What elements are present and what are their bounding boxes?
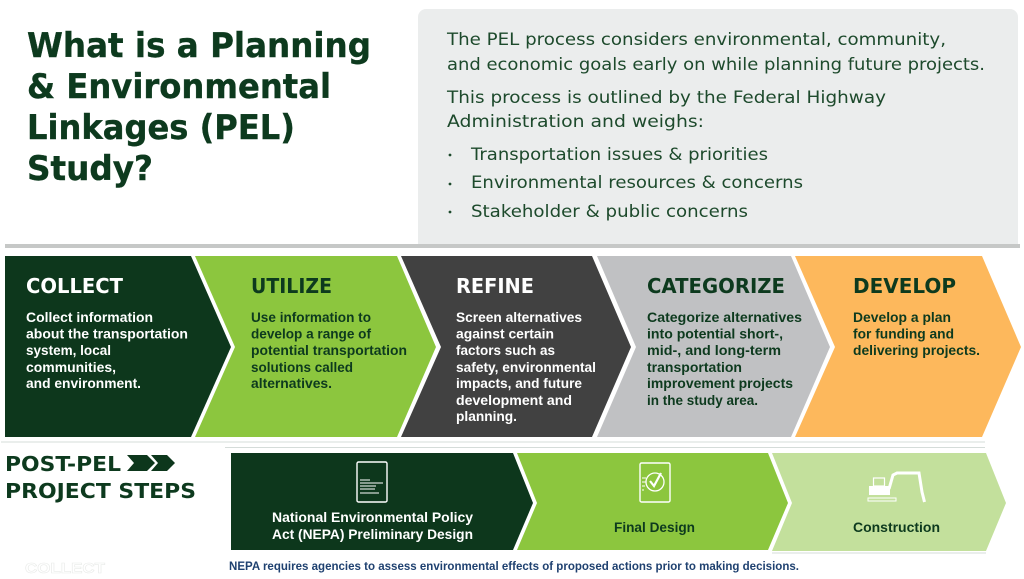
step: utilize: [195, 256, 436, 437]
step: collect: COLLECT: [26, 274, 123, 298]
heading: post-PEL project steps: [5, 452, 196, 503]
step: develop: DEVELOP: [853, 274, 956, 298]
text block: PEL description: Administration and weighs:: [447, 112, 704, 131]
list: weighed factors: Stakeholder & public concerns: [471, 202, 748, 221]
step: categorize: [597, 256, 830, 437]
title: [27, 26, 371, 189]
step: categorize: CATEGORIZE: [647, 274, 785, 298]
post step: construction: [772, 453, 1006, 551]
step: utilize: solutions called: [251, 359, 353, 375]
post step: final design: [517, 453, 788, 550]
step: collect: about the transportation: [26, 326, 188, 342]
footnote: NEPA definition: NEPA requires agencies to assess environmental effects of proposed actions prior to making decisions.: [229, 559, 799, 573]
step: refine: impacts, and future: [456, 375, 582, 391]
step: refine: factors such as: [456, 342, 555, 358]
title: What is a Planning: [27, 26, 371, 66]
list: weighed factors: Environmental resources & concerns: [471, 173, 803, 192]
post step: NEPA preliminary design: National Environmental Policy: [272, 509, 473, 525]
step: develop: [795, 256, 1021, 437]
title: Linkages (PEL): [27, 108, 295, 148]
step: develop: delivering projects.: [853, 342, 980, 358]
heading: post-PEL project steps: PROJECT STEPS: [5, 479, 196, 503]
step: refine: development and: [456, 392, 572, 408]
watermark: collect: COLLECT: [25, 560, 105, 577]
panel: intro background: [418, 9, 1018, 244]
text block: PEL description: The PEL process considers environmental, community,: [446, 30, 946, 49]
post step: construction: Construction: [853, 519, 940, 535]
step: refine: REFINE: [456, 274, 534, 298]
step: utilize: alternatives.: [251, 375, 332, 391]
icon: document: [357, 462, 387, 502]
step: collect: system, local: [26, 342, 111, 358]
step: refine: against certain: [456, 326, 554, 342]
list: weighed factors: [449, 145, 803, 221]
step: refine: Screen alternatives: [456, 309, 582, 325]
step: collect: and environment.: [26, 375, 141, 391]
step: collect: communities,: [26, 359, 116, 375]
step: categorize: in the study area.: [647, 392, 758, 408]
step: refine: planning.: [456, 408, 517, 424]
step: categorize: mid-, and long-term: [647, 342, 781, 358]
step: categorize: Categorize alternatives: [647, 309, 802, 325]
post step: NEPA preliminary design: Act (NEPA) Preliminary Design: [272, 526, 473, 542]
step: utilize: develop a range of: [251, 326, 371, 342]
step: categorize: into potential short-,: [647, 326, 783, 342]
step: refine: [401, 256, 631, 437]
step: utilize: Use information to: [251, 309, 371, 325]
step: refine: safety, environmental: [456, 359, 596, 375]
icon: excavator: [868, 473, 924, 502]
post step: final design: Final Design: [614, 519, 695, 535]
text block: PEL description: [446, 30, 985, 131]
step: categorize: improvement projects: [647, 375, 793, 391]
step: develop: Develop a plan: [853, 309, 951, 325]
panel: divider shadow: [5, 244, 1020, 248]
step: develop: for funding and: [853, 326, 954, 342]
icon: checklist document: [640, 463, 670, 502]
step: categorize: transportation: [647, 359, 742, 375]
title: Study?: [27, 149, 153, 189]
title: & Environmental: [27, 67, 331, 107]
text block: PEL description: and economic goals early on while planning future projects.: [447, 55, 985, 74]
list: weighed factors: Transportation issues & priorities: [470, 145, 768, 164]
post step: NEPA preliminary design: [231, 453, 533, 550]
heading: post-PEL project steps: POST-PEL: [5, 452, 121, 476]
icon: double chevron arrows: [127, 455, 175, 471]
step: collect: Collect information: [26, 309, 153, 325]
step: collect: [5, 256, 231, 437]
step: utilize: UTILIZE: [251, 274, 332, 298]
step: utilize: potential transportation: [251, 342, 407, 358]
text block: PEL description: This process is outlined by the Federal Highway: [446, 88, 886, 107]
